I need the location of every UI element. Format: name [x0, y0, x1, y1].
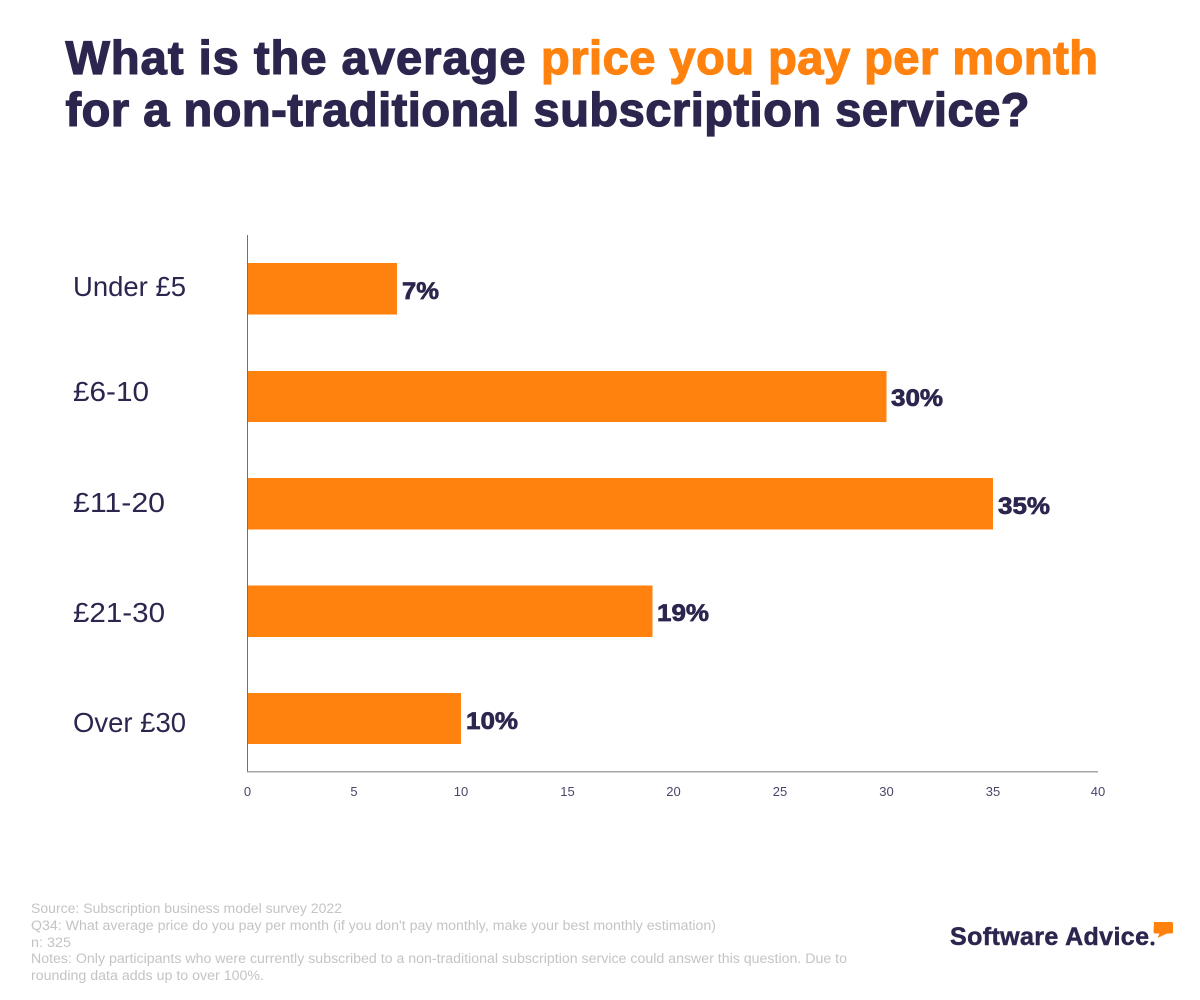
- source notes: n: 325: [31, 935, 71, 950]
- bar chart: [73, 235, 1105, 799]
- value labels: [402, 278, 1050, 735]
- logo: Software Advice: [950, 922, 1173, 951]
- title: price you pay per month: [541, 31, 1098, 84]
- category labels: Under £5: [73, 271, 186, 302]
- axes: [247, 235, 1098, 772]
- title: [66, 31, 1098, 136]
- logo wordmark: Software Advice: [950, 923, 1149, 951]
- x axis tick labels: 5: [350, 784, 358, 799]
- value labels: 35%: [998, 493, 1050, 520]
- x axis tick labels: 35: [986, 784, 1000, 799]
- category labels: Over £30: [73, 707, 186, 738]
- x axis tick labels: 20: [666, 784, 681, 799]
- source notes: Q34: What average price do you pay per month (if you don't pay monthly, make your best monthly estimation): [31, 918, 716, 933]
- source notes: rounding data adds up to over 100%.: [31, 968, 264, 983]
- x axis tick labels: 15: [560, 784, 575, 799]
- value labels: 19%: [657, 600, 709, 627]
- x axis tick labels: [244, 784, 1105, 799]
- source notes: Source: Subscription business model survey 2022: [31, 901, 342, 916]
- icon: orange speech bubble: [1154, 922, 1173, 938]
- title: for a non-traditional subscription service?: [66, 83, 1030, 136]
- category labels: £21-30: [73, 597, 165, 628]
- x axis tick labels: 25: [773, 784, 787, 799]
- value labels: 30%: [891, 385, 943, 412]
- category labels: £11-20: [73, 487, 165, 518]
- category labels: £6-10: [73, 376, 149, 407]
- x axis tick labels: 40: [1091, 784, 1105, 799]
- source notes: Notes: Only participants who were currently subscribed to a non-traditional subscription service could answer this question. Due to: [31, 951, 847, 966]
- source notes: [31, 901, 847, 983]
- icon: registered mark: [1150, 942, 1154, 946]
- x axis tick labels: 10: [454, 784, 468, 799]
- category labels: [73, 271, 186, 738]
- bars: [248, 263, 993, 744]
- x axis tick labels: 30: [879, 784, 894, 799]
- title: What is the average: [66, 31, 526, 84]
- x axis tick labels: 0: [244, 784, 251, 799]
- value labels: 7%: [402, 278, 439, 305]
- value labels: 10%: [466, 708, 518, 735]
